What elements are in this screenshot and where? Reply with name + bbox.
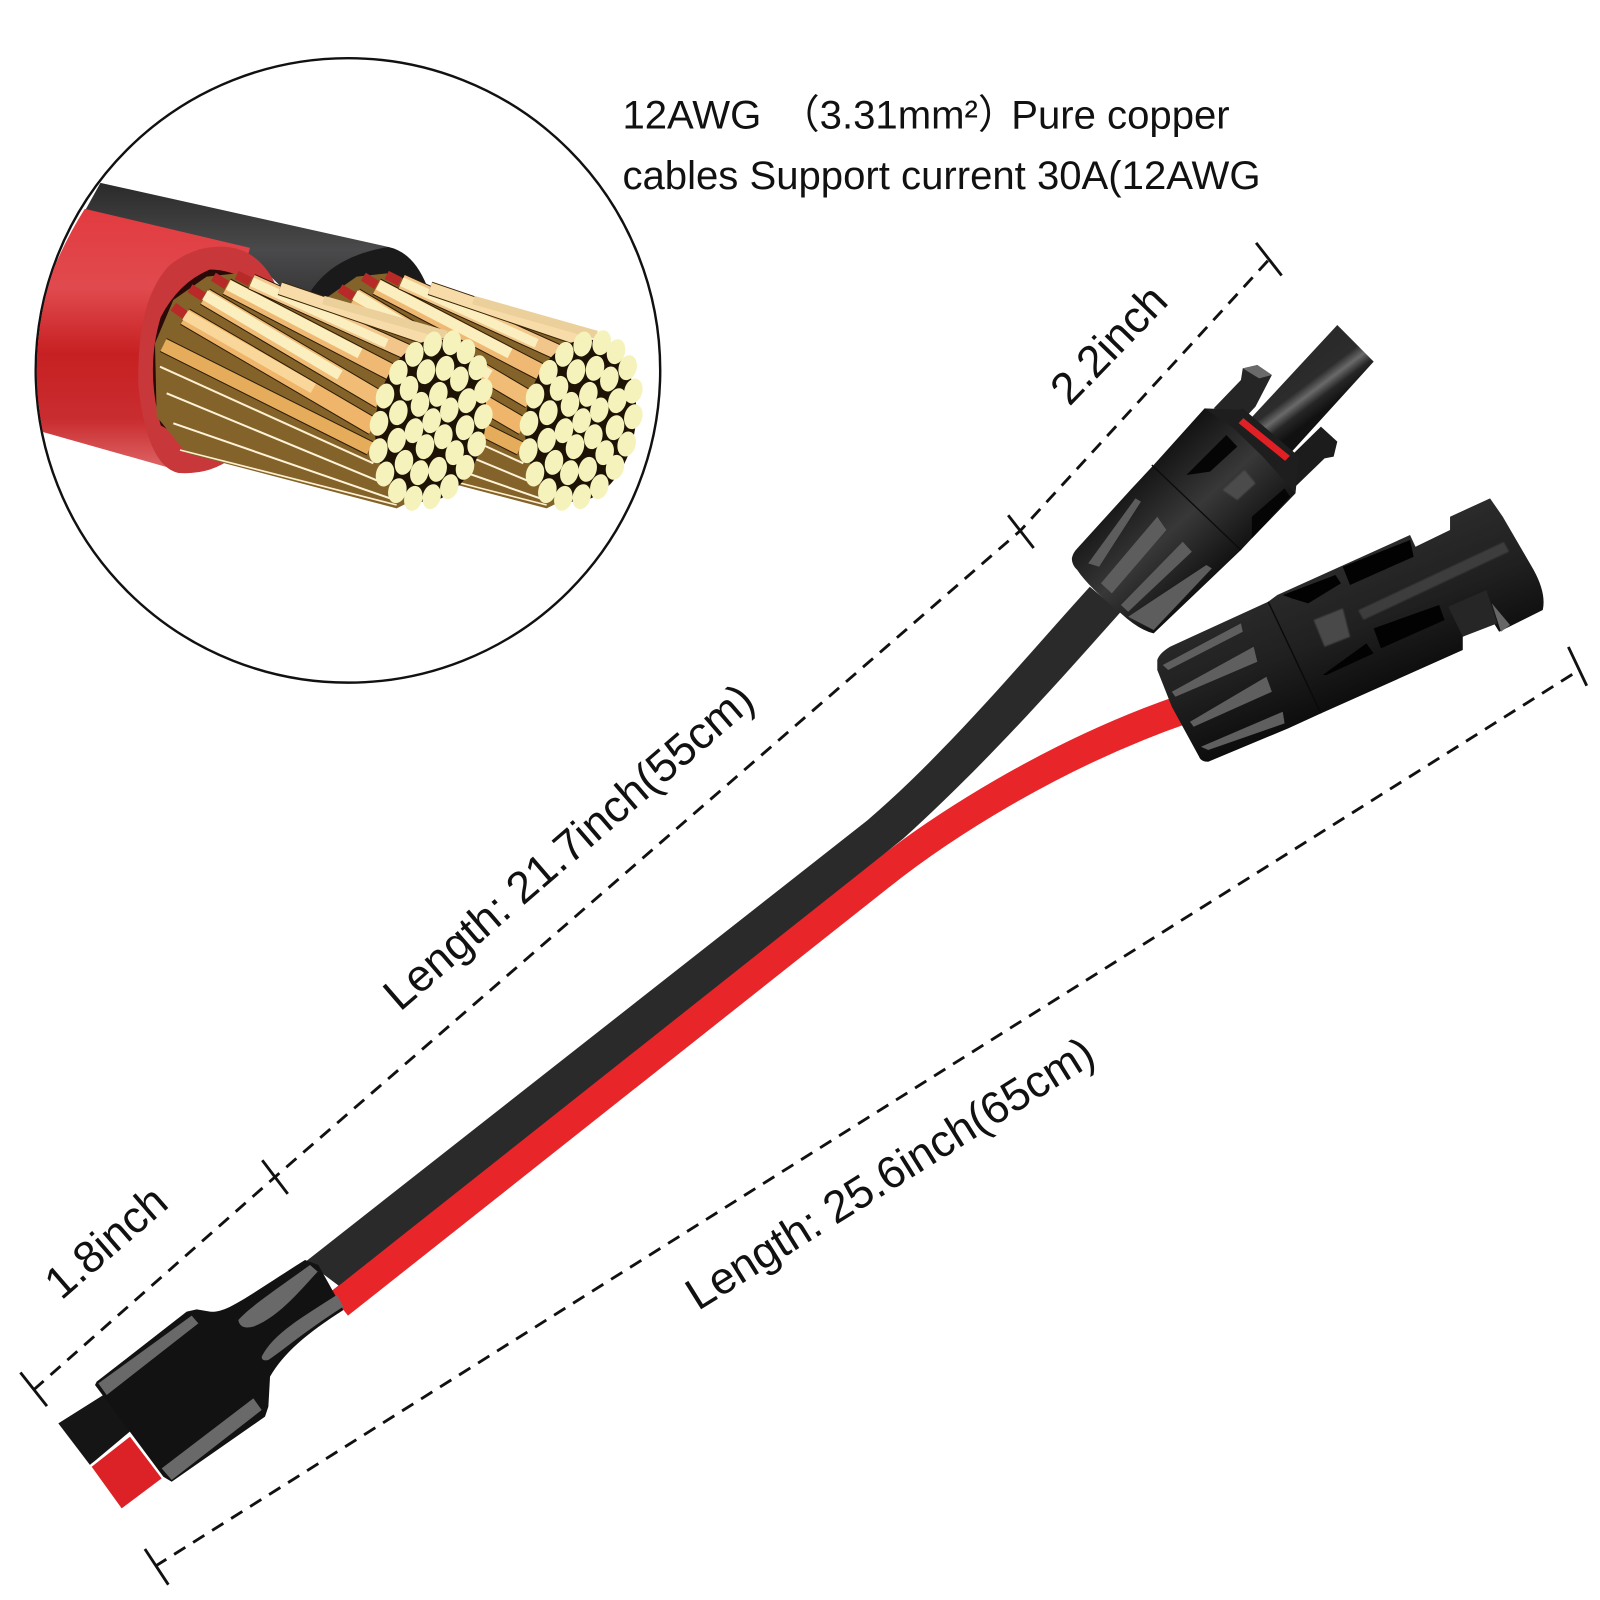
- connector: battery plug with boot: [58, 1260, 343, 1508]
- boot highlights: [98, 1265, 343, 1480]
- body: [1157, 498, 1544, 762]
- body: [1072, 408, 1295, 633]
- windows: [1283, 540, 1445, 675]
- grip ribs: [1088, 498, 1212, 630]
- boot body: [95, 1260, 343, 1482]
- specification text: Pure copper: [1011, 94, 1230, 138]
- specification text: cables Support current 30A(12AWG: [622, 154, 1261, 198]
- red cable: [339, 709, 1184, 1304]
- label: 2.2inch: 2.2inch: [1040, 275, 1177, 414]
- collar backing: [1205, 408, 1299, 500]
- pin: [1245, 325, 1374, 462]
- black jacket: [86, 182, 426, 297]
- connector: upper MC4 male: [1072, 325, 1374, 633]
- label: Length 21.7inch: Length: 21.7inch(55cm): [373, 673, 763, 1020]
- specification text: （3.31mm²）: [780, 94, 1018, 138]
- grip ribs: [1163, 623, 1285, 750]
- latch bottom: [1277, 427, 1337, 490]
- connector: lower MC4 female: [1157, 498, 1544, 762]
- label: Length 25.6inch: Length: 25.6inch(65cm): [676, 1027, 1103, 1320]
- plug contact: black: [58, 1395, 132, 1465]
- specification text: 12AWG: [622, 94, 761, 138]
- tube highlight and neck: [1268, 547, 1510, 713]
- plug contact: red: [92, 1437, 162, 1508]
- label: 1.8inch: 1.8inch: [34, 1175, 177, 1309]
- dimension line: top, with end ticks: [20, 243, 1282, 1406]
- windows and neck: [1152, 435, 1290, 550]
- red jacket: [35, 209, 277, 473]
- copper strands: rear conductor: [305, 273, 647, 513]
- dimension line: bottom, with end ticks: [145, 647, 1587, 1585]
- collar with red ring: [1235, 415, 1289, 462]
- copper strands: front conductor: [155, 273, 497, 513]
- black cable: [306, 587, 1120, 1286]
- panel: copper cable close-up circle: [35, 58, 660, 683]
- latch top: [1214, 365, 1272, 418]
